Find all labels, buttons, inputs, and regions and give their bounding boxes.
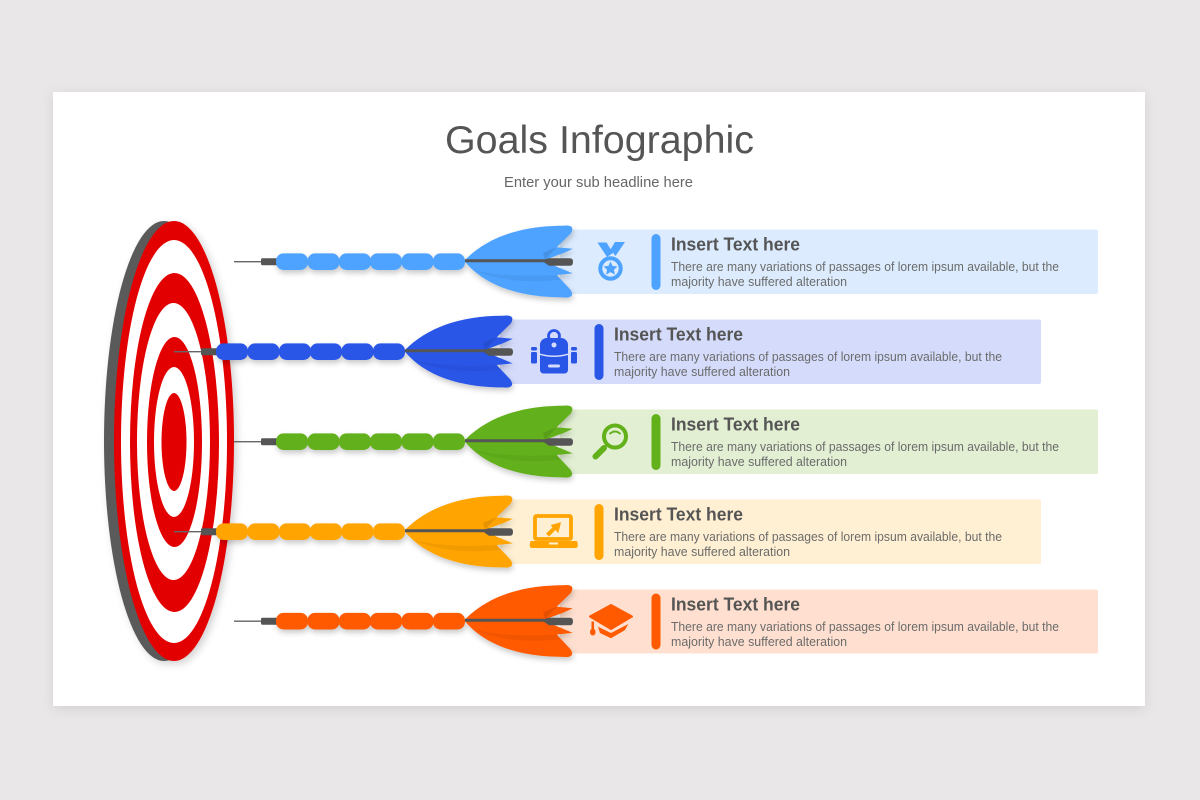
dart: row 3 bbox=[234, 405, 573, 478]
text block: Insert Text here bbox=[614, 504, 743, 524]
icon: laptop bbox=[530, 516, 578, 548]
text block: Insert Text here bbox=[671, 414, 800, 434]
text block: majority have suffered alteration bbox=[671, 455, 847, 469]
target board bbox=[104, 221, 234, 661]
panel: row 4 bbox=[500, 500, 1041, 564]
text block: There are many variations of passages of lorem ipsum available, but the bbox=[671, 260, 1059, 274]
panel: row 3 bbox=[560, 410, 1098, 474]
accent bar bbox=[594, 504, 604, 560]
subtitle: Enter your sub headline here bbox=[504, 175, 693, 191]
text block bbox=[614, 324, 1002, 379]
text block: majority have suffered alteration bbox=[614, 365, 790, 379]
dart: row 4 bbox=[174, 495, 513, 568]
text block: Insert Text here bbox=[671, 234, 800, 254]
text block: There are many variations of passages of lorem ipsum available, but the bbox=[614, 350, 1002, 364]
icon: medal bbox=[598, 242, 625, 279]
text block: Insert Text here bbox=[614, 324, 743, 344]
text block: majority have suffered alteration bbox=[614, 545, 790, 559]
panel: row 1 bbox=[560, 230, 1098, 294]
text block: Insert Text here bbox=[671, 594, 800, 614]
text block: There are many variations of passages of lorem ipsum available, but the bbox=[671, 440, 1059, 454]
accent bar bbox=[652, 414, 660, 470]
text block bbox=[671, 594, 1059, 649]
panel: row 2 bbox=[500, 320, 1041, 384]
text block: There are many variations of passages of lorem ipsum available, but the bbox=[614, 530, 1002, 544]
text block bbox=[614, 504, 1002, 559]
title: Goals Infographic bbox=[445, 119, 754, 162]
accent bar bbox=[594, 324, 604, 380]
text block bbox=[671, 234, 1059, 289]
icon: magnifier bbox=[596, 426, 626, 456]
text block bbox=[671, 414, 1059, 469]
dart: row 1 bbox=[234, 225, 573, 298]
accent bar bbox=[652, 234, 660, 290]
panel: row 5 bbox=[560, 590, 1098, 654]
text block: majority have suffered alteration bbox=[671, 635, 847, 649]
background card bbox=[53, 92, 1145, 706]
dart: row 2 bbox=[174, 315, 513, 388]
icon: graduation cap bbox=[590, 605, 632, 638]
accent bar bbox=[652, 594, 660, 650]
dart: row 5 bbox=[234, 585, 573, 657]
text block: majority have suffered alteration bbox=[671, 275, 847, 289]
icon: backpack bbox=[531, 330, 577, 374]
text block: There are many variations of passages of lorem ipsum available, but the bbox=[671, 620, 1059, 634]
